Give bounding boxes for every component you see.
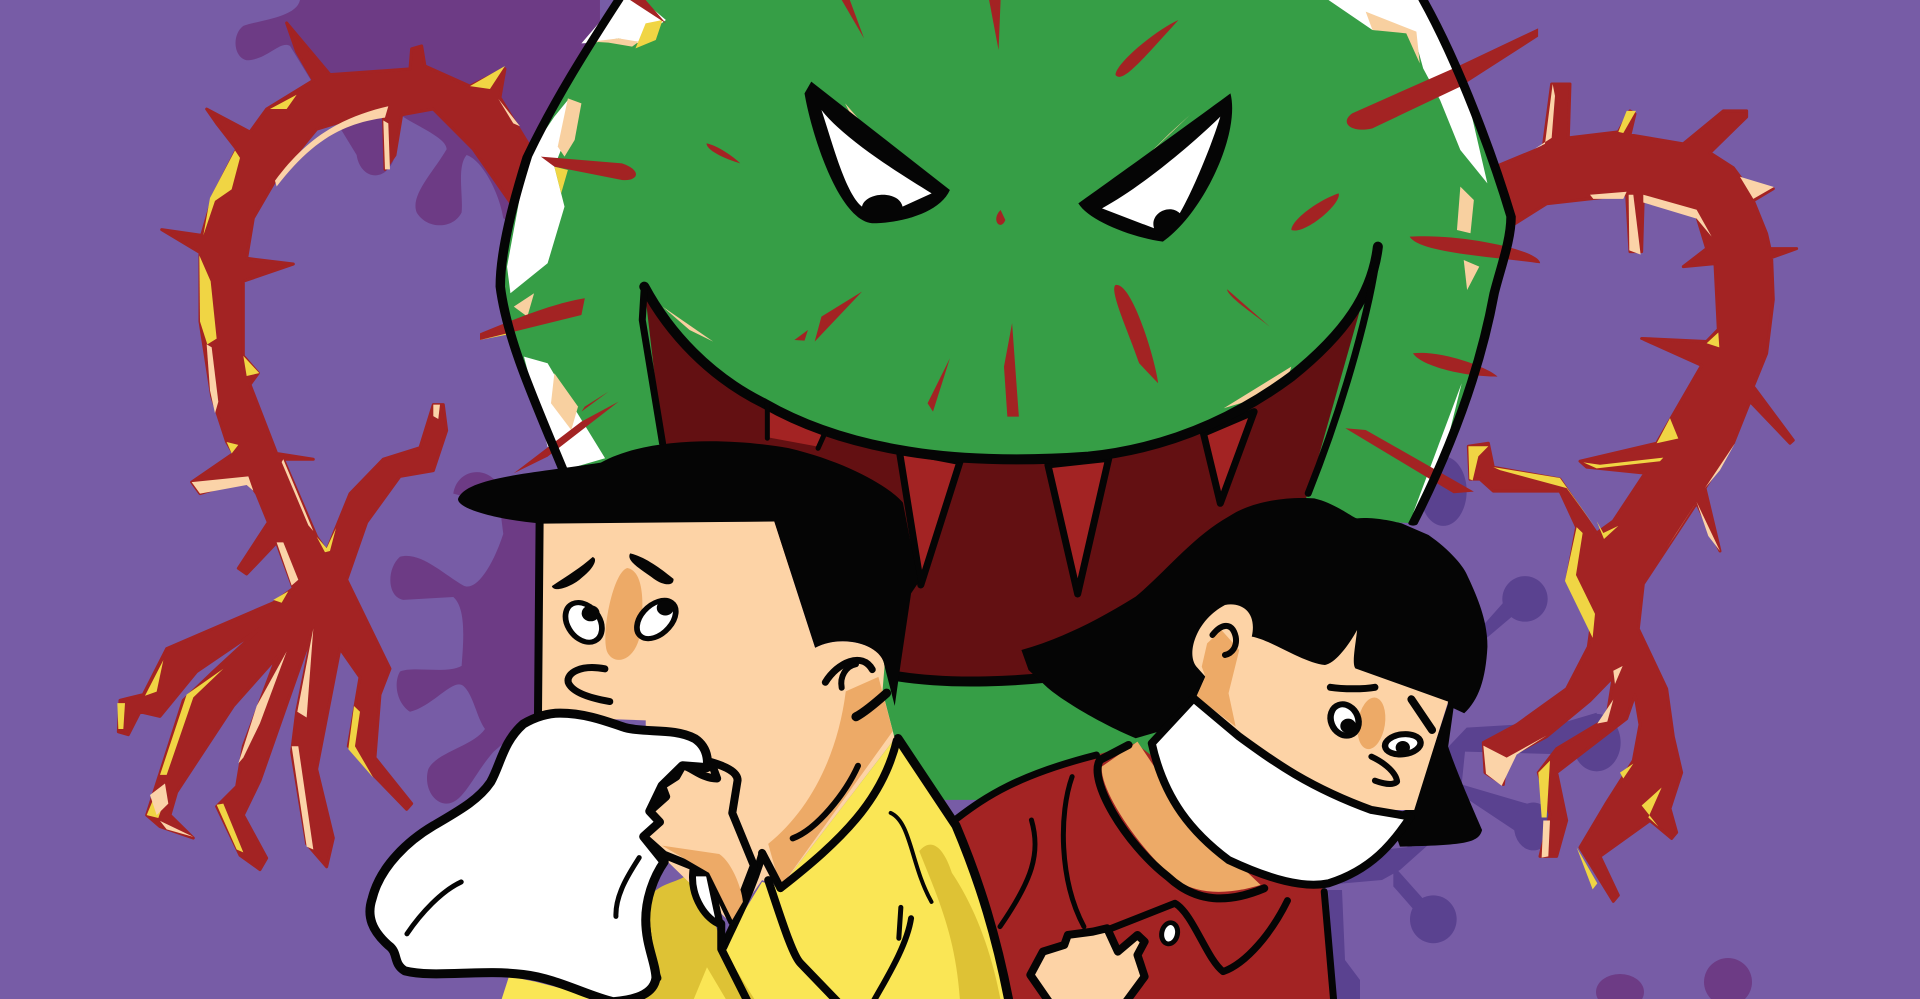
background virus silhouettes, right <box>1393 456 1621 943</box>
woman eyes <box>1326 701 1422 757</box>
left angry eye <box>805 82 950 223</box>
right blood vessel <box>1468 84 1797 901</box>
tissue <box>370 713 707 999</box>
virus mouth <box>642 247 1378 682</box>
man face <box>542 521 895 924</box>
mouth lines <box>644 247 1378 459</box>
virus spikes <box>480 0 1540 493</box>
right angry eye <box>1078 93 1232 242</box>
background virus silhouettes, left <box>236 0 600 804</box>
woman red shirt <box>957 743 1334 999</box>
man collar lines <box>646 740 931 999</box>
left blood vessel <box>117 23 533 870</box>
virus outline <box>500 0 1511 523</box>
woman nose <box>1354 696 1389 751</box>
man brows and mouth <box>552 553 674 702</box>
woman hair <box>1021 498 1487 847</box>
man sleeve cuff <box>693 873 720 924</box>
bottom purple blobs <box>1596 958 1752 999</box>
man with tissue <box>370 441 1009 999</box>
man nose <box>605 568 642 660</box>
woman mask <box>1152 698 1411 885</box>
woman shirt creases <box>1000 777 1287 972</box>
man hat and hair <box>458 441 918 706</box>
virus green body with rim <box>500 0 1511 523</box>
teeth <box>899 450 960 585</box>
woman fist <box>1030 928 1145 999</box>
right vessel highlights <box>1468 111 1719 889</box>
woman ear shade <box>1196 630 1239 727</box>
woman with mask <box>957 498 1487 999</box>
man shirt shading <box>919 845 1001 999</box>
man fist <box>644 762 754 922</box>
man yellow shirt <box>723 739 1009 999</box>
peach rim flecks <box>514 12 1479 430</box>
white rim patches <box>507 0 1487 513</box>
man ear detail and jaw <box>793 660 887 838</box>
woman neck <box>1102 742 1261 892</box>
woman brows and mouth <box>1330 687 1432 784</box>
tissue creases <box>407 858 639 934</box>
left vessel highlights <box>117 66 505 852</box>
woman face <box>1192 604 1448 810</box>
man neck shade <box>768 677 893 887</box>
background virus body below mask <box>1325 845 1428 999</box>
green area below mouth <box>859 650 1170 800</box>
virus monster <box>480 0 1540 800</box>
man eyes <box>558 594 684 648</box>
